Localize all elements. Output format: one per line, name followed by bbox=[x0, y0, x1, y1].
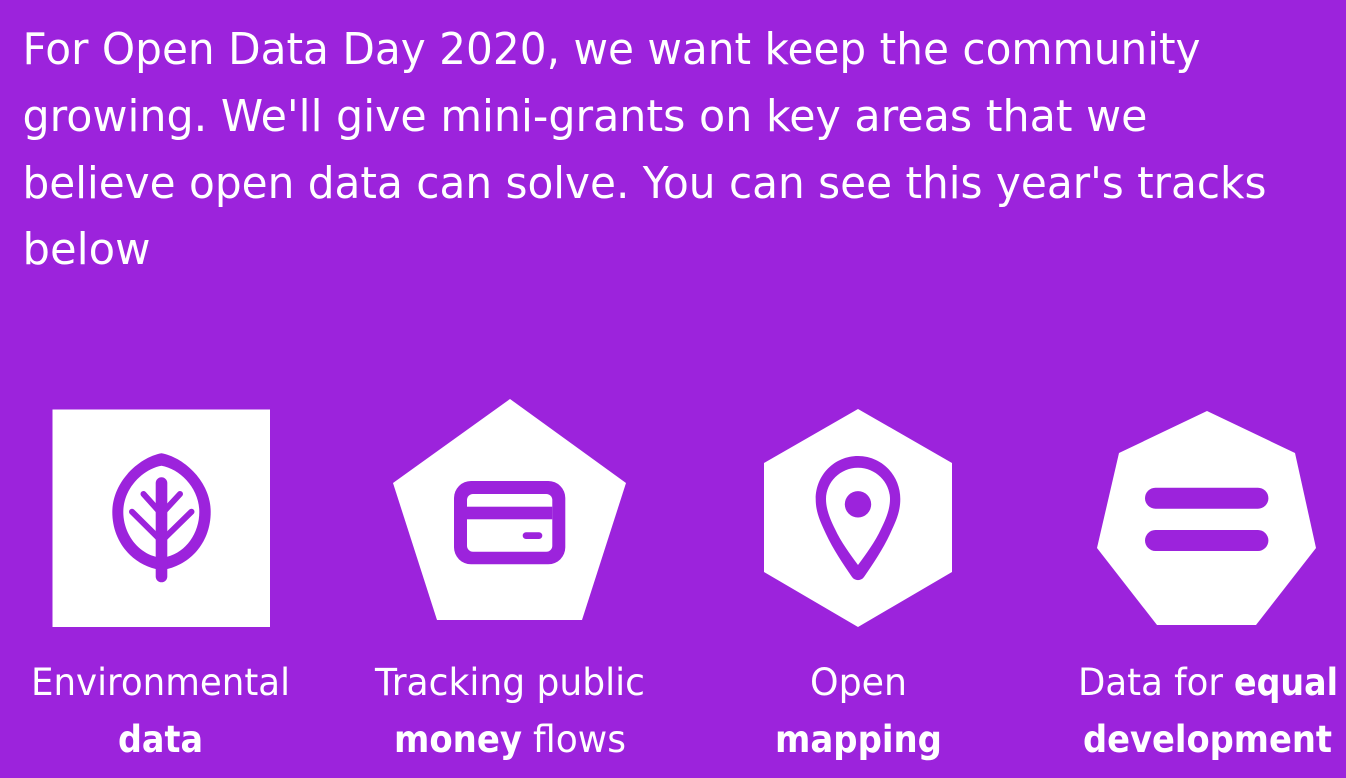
icon: equal bars bbox=[1145, 488, 1268, 551]
square badge bbox=[52, 410, 270, 627]
intro text: For Open Data Day 2020, we want keep the community bbox=[22, 24, 1200, 75]
label: Open mapping bbox=[775, 661, 942, 761]
icon: credit card bbox=[454, 481, 565, 564]
intro text: below bbox=[22, 224, 150, 275]
label: Data for equal development bbox=[1078, 661, 1338, 761]
hexagon badge bbox=[764, 409, 952, 627]
icon: map pin bbox=[816, 456, 900, 580]
label: Open mapping: Open bbox=[810, 661, 907, 704]
track: open mapping bbox=[764, 409, 952, 627]
label: Data for equal development: Data for bbox=[1078, 661, 1224, 704]
label: Environmental data bbox=[31, 661, 290, 761]
heptagon badge bbox=[1097, 411, 1316, 625]
label: Tracking public money flows: money bbox=[394, 718, 522, 761]
label: Environmental data: Environmental bbox=[31, 661, 290, 704]
icon: leaf bbox=[112, 453, 211, 582]
label: Open mapping: mapping bbox=[775, 718, 942, 761]
track: data for equal development bbox=[1097, 411, 1316, 625]
label: Tracking public money flows: Tracking public bbox=[374, 661, 645, 704]
label: Environmental data: data bbox=[118, 718, 203, 761]
intro text bbox=[22, 24, 1266, 275]
track: environmental data bbox=[52, 410, 270, 627]
track: tracking public money flows bbox=[393, 399, 626, 620]
label: Tracking public money flows bbox=[374, 661, 645, 761]
intro text: growing. We'll give mini-grants on key areas that we bbox=[22, 91, 1148, 142]
label: Tracking public money flows: flows bbox=[533, 718, 626, 761]
pentagon badge bbox=[393, 399, 626, 620]
intro text: believe open data can solve. You can see this year's tracks bbox=[22, 158, 1266, 209]
